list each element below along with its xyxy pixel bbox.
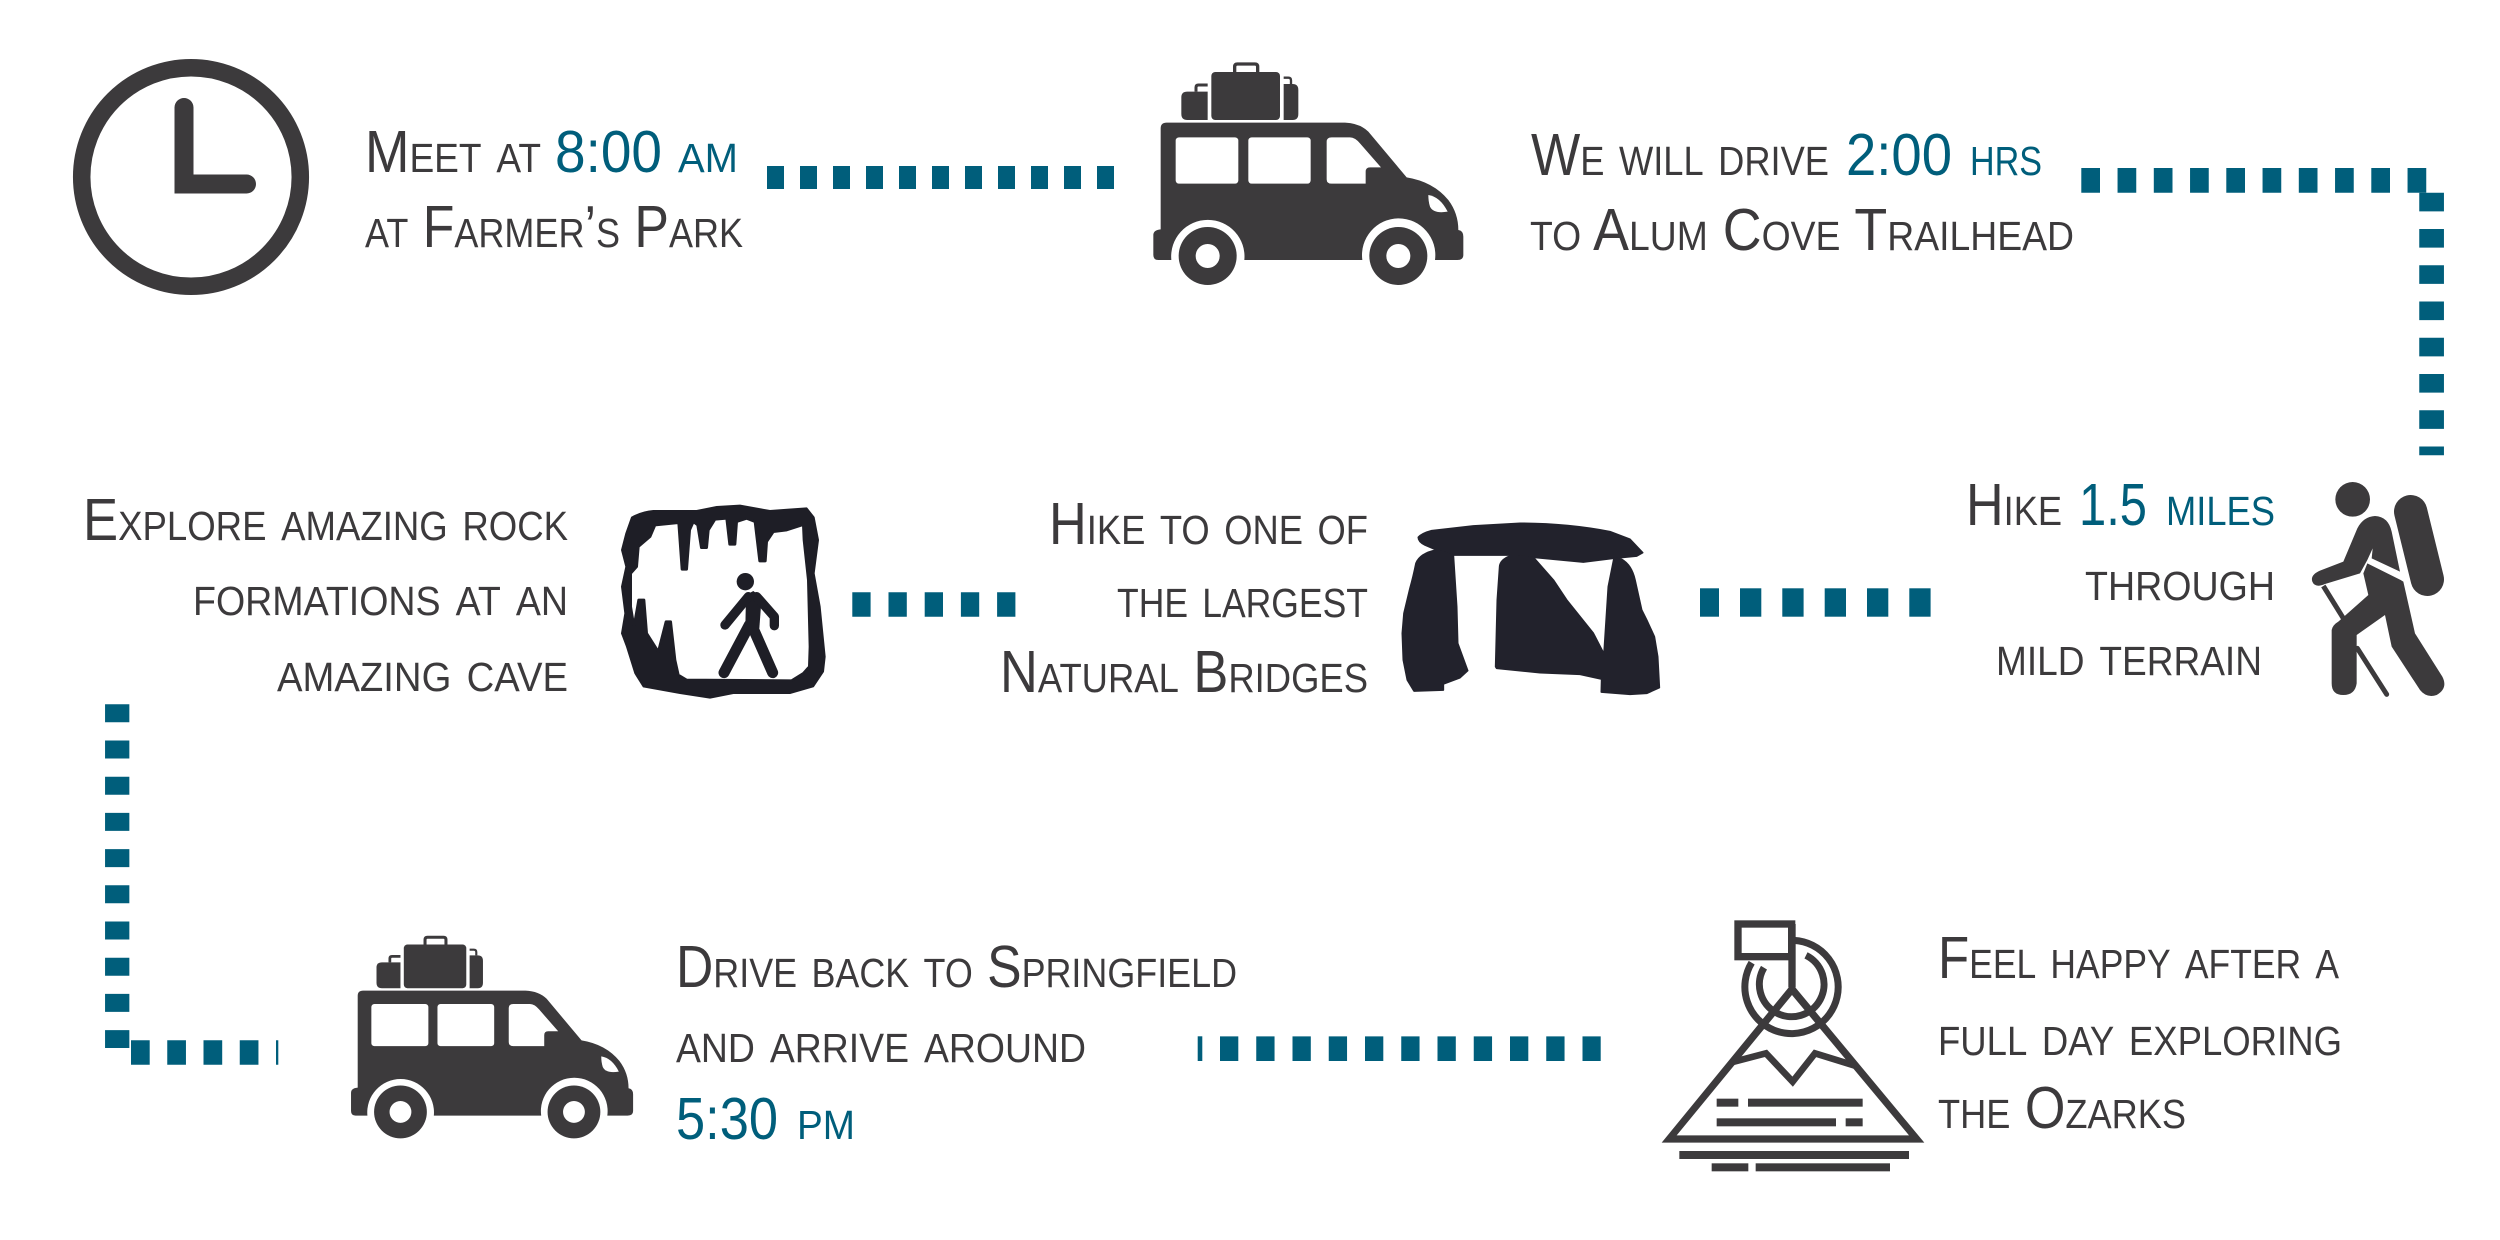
- text: drive 2:00 hrs: 2:00: [1846, 122, 1952, 188]
- icon: natural bridge: [1402, 523, 1659, 694]
- text: drive back to springfield: Drive back to Springfield: [676, 934, 1237, 1000]
- text: drive 2:00 hrs: to Alum Cove Trailhead: [1530, 197, 2074, 263]
- text: hike to natural bridges: [1000, 491, 1368, 705]
- text: hike to natural bridges: Natural Bridges: [1000, 639, 1368, 705]
- arrow: dotted path bridge to cave: [852, 592, 1015, 617]
- icon: van with luggage: [1153, 64, 1463, 285]
- arrow: dotted path hiker to bridge: [1700, 588, 1931, 617]
- text: explore rock formations: [83, 487, 568, 704]
- text: drive back to springfield: and arrive around: [676, 1009, 1086, 1075]
- text: hike 1.5 miles: Hike: [1966, 472, 2062, 538]
- icon: mountain with flag: [1662, 924, 1924, 1171]
- text: meet at 8:00 am: Meet at: [365, 119, 541, 185]
- text: hike to natural bridges: Hike to one of: [1049, 491, 1368, 557]
- text: meet at 8:00 am: am: [678, 119, 738, 185]
- text: explore rock formations: amazing cave: [277, 638, 568, 704]
- text: feel happy: Feel happy after a: [1938, 925, 2340, 991]
- icon: return van with luggage: [351, 937, 633, 1138]
- text: drive 2:00 hrs: hrs: [1970, 122, 2042, 188]
- text: explore rock formations: Explore amazing rock: [83, 487, 568, 553]
- icon: cave with walker: [622, 505, 825, 698]
- icon: clock: [82, 68, 300, 286]
- arrow: dotted path van to hiker: [2081, 180, 2432, 455]
- text: drive 2:00 hrs: We will drive: [1531, 122, 1829, 188]
- text: feel happy: the Ozarks: [1938, 1075, 2186, 1141]
- arrow: dotted path mountain to return van: [1198, 1036, 1601, 1061]
- text: hike to natural bridges: the largest: [1117, 564, 1368, 630]
- arrow: dotted path clock to van: [767, 166, 1114, 189]
- text: hike 1.5 miles: through: [2085, 547, 2275, 613]
- text: drive 2:00 hrs: [1530, 122, 2074, 263]
- text: drive back to springfield: [676, 934, 1237, 1152]
- text: hike 1.5 miles: mild terrain: [1996, 622, 2262, 688]
- icon: hiker: [2312, 482, 2444, 696]
- text: feel happy: [1938, 925, 2342, 1141]
- text: hike 1.5 miles: [1966, 472, 2275, 688]
- text: meet at 8:00 am: [365, 119, 743, 260]
- text: drive back to springfield: 5:30: [676, 1086, 778, 1152]
- text: hike 1.5 miles: miles: [2166, 472, 2275, 538]
- arrow: dotted path cave to return van: [117, 704, 278, 1052]
- text: explore rock formations: formations at an: [193, 562, 568, 628]
- text: drive back to springfield: pm: [797, 1086, 855, 1152]
- text: hike 1.5 miles: 1.5: [2079, 472, 2147, 538]
- text: meet at 8:00 am: at Farmer’s Park: [365, 194, 743, 260]
- text: feel happy: full day exploring: [1938, 1002, 2342, 1068]
- text: meet at 8:00 am: 8:00: [555, 119, 662, 185]
